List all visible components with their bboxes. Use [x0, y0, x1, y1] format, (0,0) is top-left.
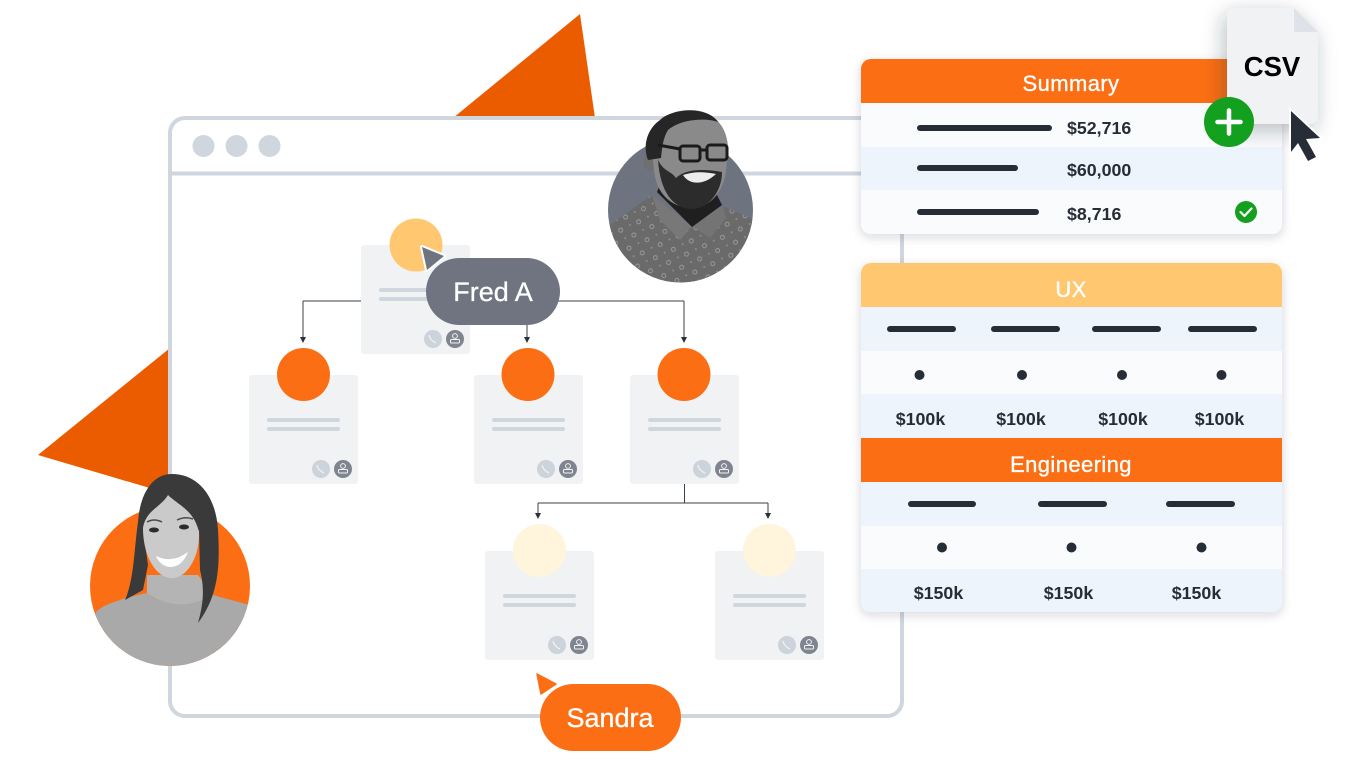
engineering column bars: [908, 501, 1235, 507]
connector lines: [300, 301, 771, 519]
row 2: $60,000: [1067, 160, 1131, 180]
decorative triangle: top: [453, 14, 595, 118]
UX salaries: [896, 409, 1244, 429]
engineering dots: [937, 542, 1206, 552]
cursor: Sandra: [537, 674, 556, 694]
cursor: Fred: [422, 247, 444, 270]
org card: top manager: [361, 218, 470, 354]
engineering salaries: $150k: [1172, 583, 1221, 603]
org card: lower left: [485, 524, 594, 660]
engineering salaries: $150k: [1044, 583, 1093, 603]
UX salaries: $100k: [1098, 409, 1148, 429]
heading: Summary: Summary: [1023, 71, 1119, 96]
panel: team tables: [861, 263, 1282, 612]
panel: summary table: [861, 59, 1282, 234]
label: Sandra: Sandra: [566, 703, 655, 733]
engineering salaries: [914, 583, 1221, 603]
label: Fred A: [426, 258, 560, 325]
org card: lower right: [715, 524, 824, 660]
heading: UX: UX: [1055, 277, 1087, 302]
portrait: smiling woman: [86, 474, 250, 670]
icon: CSV file: CSV: [1244, 51, 1301, 82]
icon: mouse pointer: [1291, 111, 1320, 161]
decorative triangle: left: [38, 348, 170, 494]
UX dots: [914, 370, 1226, 380]
org card: middle report: [474, 348, 583, 484]
heading: Engineering: Engineering: [1010, 452, 1132, 477]
row 1: $52,716: [1067, 118, 1131, 138]
UX column bars: [887, 326, 1257, 332]
row 2: [917, 160, 1131, 180]
label: Fred A: Fred A: [453, 277, 533, 307]
icon: CSV file: [1227, 8, 1318, 124]
org card: left report: [249, 348, 358, 484]
label: Sandra: [540, 684, 681, 751]
UX salaries: $100k: [996, 409, 1046, 429]
org card: right report: [630, 348, 739, 484]
row 3: $8,716: [1067, 204, 1121, 224]
browser window: [170, 118, 902, 716]
engineering salaries: $150k: [914, 583, 963, 603]
UX salaries: $100k: [896, 409, 945, 429]
portrait: man with glasses: [608, 110, 753, 282]
UX salaries: $100k: [1195, 409, 1244, 429]
icon: green plus: [1204, 97, 1254, 147]
icon: green check: [1235, 201, 1257, 223]
row 1: [917, 118, 1131, 138]
row 3: [917, 204, 1121, 224]
